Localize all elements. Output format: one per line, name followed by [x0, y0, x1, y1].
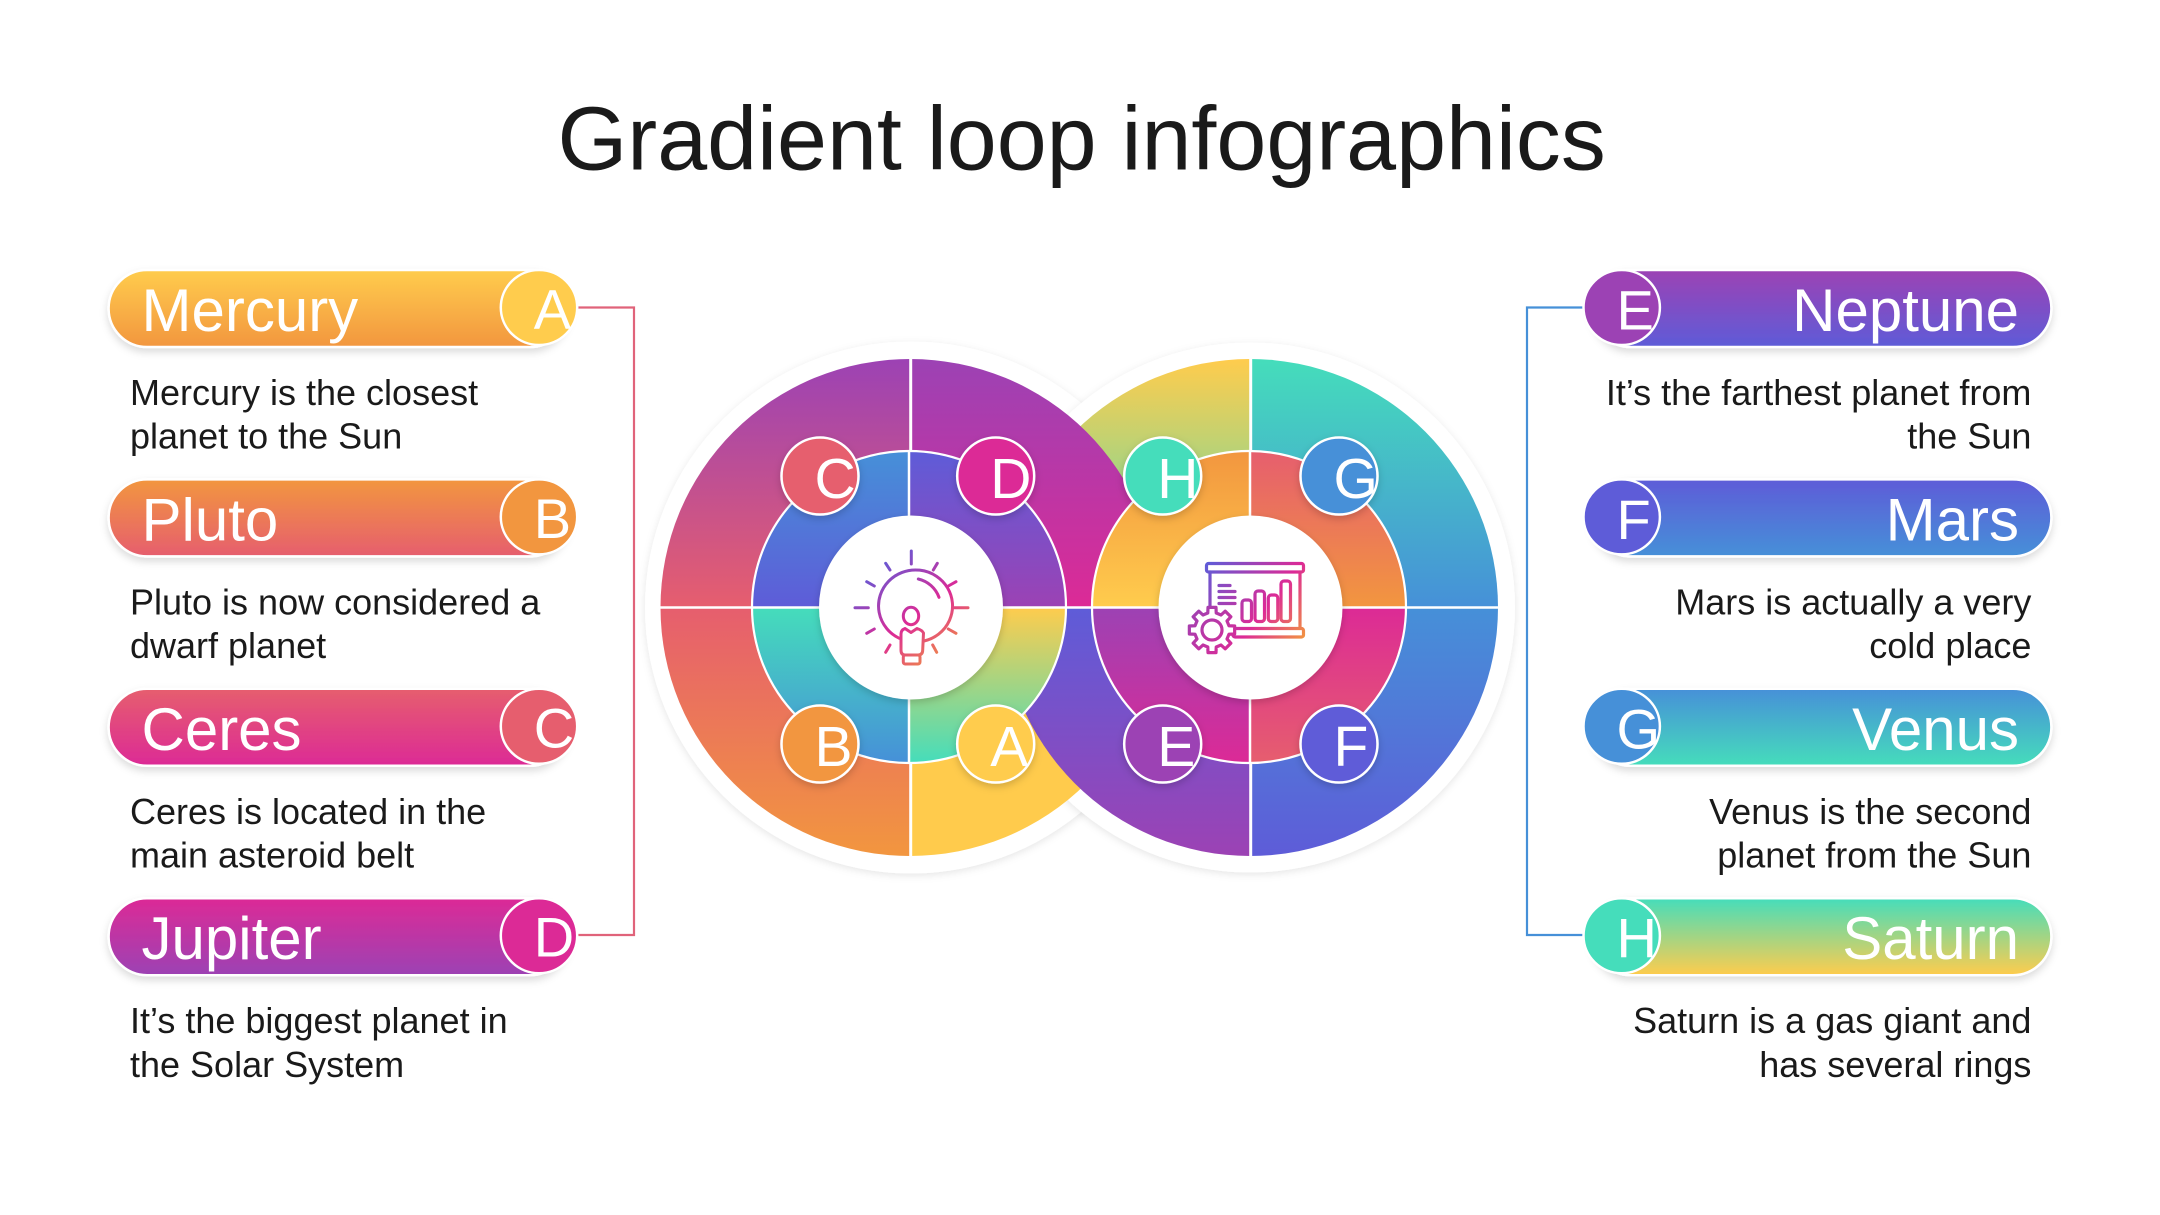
left centre disc	[819, 516, 1003, 700]
item: Neptune	[1584, 270, 2051, 457]
item: Jupiter	[109, 898, 577, 1085]
left inner ring	[752, 451, 1066, 763]
item: Venus: G	[1616, 697, 1660, 760]
left outer ring: under quadrants	[660, 359, 1160, 856]
item: Jupiter: the Solar System	[130, 1044, 404, 1085]
item: Jupiter: It’s the biggest planet in	[130, 1000, 508, 1041]
item: Mercury	[109, 270, 577, 457]
item: Mars: Mars is actually a very	[1675, 581, 2031, 622]
item: Neptune: E	[1616, 278, 1654, 342]
item: Pluto: Pluto is now considered a	[130, 581, 541, 622]
loop diagram	[645, 342, 1515, 874]
item: Mars	[1584, 479, 2051, 666]
item: Jupiter: Jupiter	[142, 905, 322, 972]
item: Saturn	[1584, 898, 2051, 1085]
item: Ceres	[109, 689, 577, 875]
item: Mars: F	[1616, 488, 1651, 551]
badge A	[957, 706, 1034, 782]
outer segment D	[910, 359, 1160, 608]
right column	[1584, 270, 2051, 1085]
badge B: B	[814, 715, 853, 779]
item: Saturn: Saturn	[1842, 905, 2019, 972]
badge C	[782, 438, 858, 514]
item: Venus	[1584, 689, 2051, 875]
right centre disc	[1158, 516, 1342, 700]
item: Venus: planet from the Sun	[1717, 834, 2031, 875]
item: Pluto: dwarf planet	[130, 625, 326, 666]
right circle halo	[985, 342, 1515, 872]
badge A: A	[990, 715, 1028, 779]
badge G: G	[1334, 447, 1378, 511]
item: Neptune: Neptune	[1792, 277, 2019, 344]
badge H: H	[1157, 447, 1198, 511]
item: Saturn: Saturn is a gas giant and	[1633, 1000, 2031, 1041]
item: Venus: Venus	[1852, 696, 2019, 763]
badge F	[1300, 706, 1378, 782]
left column	[109, 270, 577, 1085]
badge E: E	[1157, 715, 1195, 779]
badge C: C	[814, 447, 856, 511]
item: Jupiter: D	[534, 906, 574, 969]
item: Mercury: planet to the Sun	[130, 416, 402, 457]
item: Pluto: B	[534, 487, 571, 550]
item: Ceres: Ceres	[142, 696, 302, 763]
badge H	[1124, 438, 1201, 514]
item: Mars: cold place	[1869, 625, 2031, 666]
item: Saturn: H	[1616, 907, 1657, 970]
badge D	[957, 438, 1034, 514]
connector: right bracket	[1527, 308, 1584, 935]
item: Mars: Mars	[1886, 486, 2019, 553]
right inner ring	[1092, 451, 1406, 763]
item: Mercury: A	[534, 278, 572, 340]
badge G	[1300, 438, 1378, 514]
item: Pluto: Pluto	[142, 486, 278, 553]
connector: left bracket	[577, 308, 634, 935]
item: Ceres: C	[534, 696, 574, 759]
icon: light bulb with person	[855, 551, 968, 664]
badge E	[1124, 706, 1201, 782]
outer segment E	[1002, 608, 1250, 856]
icon: presentation board with gear	[1189, 564, 1304, 653]
right outer ring: under quadrants	[1002, 359, 1498, 856]
left circle halo	[645, 342, 1177, 874]
item: Ceres: main asteroid belt	[130, 834, 414, 875]
badge D: D	[990, 447, 1031, 511]
badge F: F	[1334, 715, 1368, 779]
item: Venus: Venus is the second	[1709, 791, 2031, 832]
item: Saturn: has several rings	[1759, 1044, 2031, 1085]
badge B	[782, 706, 858, 782]
title: Gradient loop infographics	[557, 90, 1606, 190]
item: Neptune: the Sun	[1907, 416, 2031, 457]
item: Neptune: It’s the farthest planet from	[1606, 372, 2031, 413]
item: Mercury: Mercury	[142, 277, 358, 344]
item: Ceres: Ceres is located in the	[130, 791, 486, 832]
item: Mercury: Mercury is the closest	[130, 372, 478, 413]
item: Pluto	[109, 479, 577, 666]
